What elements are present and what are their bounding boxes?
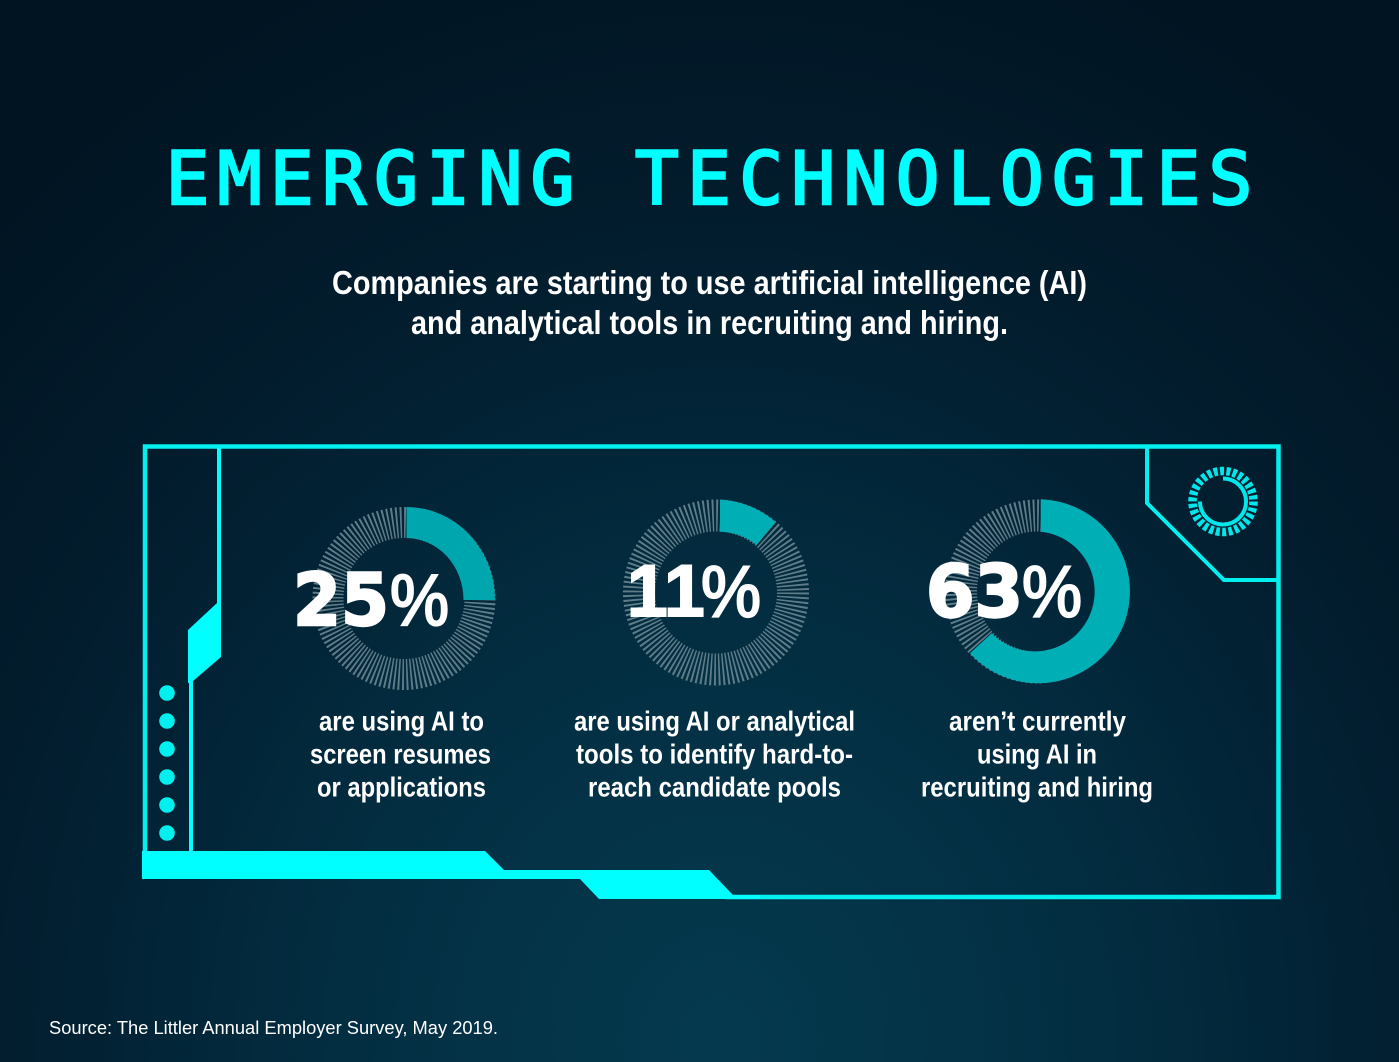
subtitle [332,264,1087,341]
subtitle: and analytical tools in recruiting and hiring. [411,304,1008,341]
icon: spinner [1192,471,1254,532]
frame outline [145,446,1278,897]
value: % [390,561,449,641]
title: EMERGING TECHNOLOGIES [166,137,1261,222]
indicator dots [159,685,175,841]
caption: 63% [921,706,1153,802]
caption: 25%: or applications [317,772,486,802]
left vertical connector with chevron [188,448,221,852]
donut chart: 11% [627,500,793,670]
donut chart: 25% [293,507,495,674]
caption: 11% [574,706,855,802]
caption: 11%: reach candidate pools [588,772,841,802]
value [926,550,1082,634]
value: % [1022,552,1082,632]
bottom stepped bar [142,851,760,899]
caption: 63%: using AI in [977,738,1097,770]
value [293,558,449,642]
value: 25 [293,558,389,642]
caption: 25%: screen resumes [310,738,491,770]
corner cut line [1147,446,1278,580]
caption: 25% [310,706,491,802]
value: 11 [627,551,705,632]
panel frame [142,446,1278,899]
value [627,551,761,632]
caption: 63%: recruiting and hiring [921,772,1153,802]
caption: 25%: are using AI to [319,706,484,736]
value: 63 [926,550,1023,634]
value: % [701,552,761,632]
caption: 11%: are using AI or analytical [574,706,855,736]
source note: Source: The Littler Annual Employer Survey, May 2019. [49,1018,498,1038]
caption: 11%: tools to identify hard-to- [576,738,853,770]
caption: 63%: aren’t currently [949,706,1126,736]
subtitle: Companies are starting to use artificial intelligence (AI) [332,264,1087,301]
donut chart: 63% [926,499,1130,683]
